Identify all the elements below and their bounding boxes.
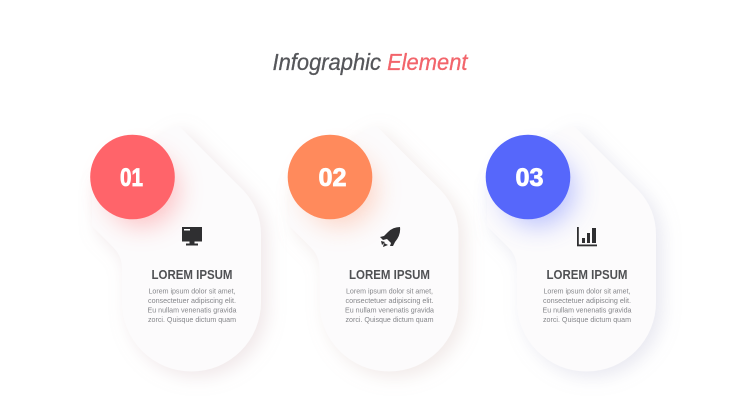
body text 02: zorci. Quisque dictum quam: [346, 315, 434, 324]
body text 01: Eu nullam venenatis gravida: [148, 306, 237, 314]
body text 03: [542, 286, 632, 324]
number circle 02: [288, 135, 372, 219]
body text 03: Lorem ipsum dolor sit amet,: [544, 286, 630, 296]
icon: bar chart: [577, 227, 597, 246]
body text 01: Lorem ipsum dolor sit amet,: [148, 286, 236, 296]
body text 03: Eu nullam venenatis gravida: [542, 306, 632, 314]
card shape 01: [92, 126, 261, 371]
body text 01: [148, 286, 237, 324]
card shape 02: [290, 126, 458, 371]
body text 02: Eu nullam venenatis gravida: [345, 306, 434, 314]
panel: step 02: [288, 126, 458, 371]
icon: rocket: [380, 227, 400, 247]
body text 03: zorci. Quisque dictum quam: [543, 315, 631, 324]
body text 01: consectetuer adipiscing elit.: [148, 296, 236, 305]
circle glow 01: [106, 154, 178, 226]
title: Infographic Element: [272, 49, 469, 75]
body text 02: consectetuer adipiscing elit.: [346, 296, 434, 305]
panel: step 01: [90, 126, 261, 371]
number 03: 03: [516, 164, 544, 192]
icon: monitor: [182, 227, 202, 246]
heading 01: LOREM IPSUM: [152, 268, 232, 282]
body text 02: Lorem ipsum dolor sit amet,: [346, 286, 433, 296]
number circle 01: [90, 135, 175, 219]
heading 03: LOREM IPSUM: [546, 268, 628, 282]
panel: step 03: [486, 126, 656, 371]
number 01: 01: [120, 164, 143, 192]
number 02: 02: [318, 164, 346, 192]
number circle 03: [486, 135, 570, 219]
circle glow 03: [502, 154, 574, 226]
body text 01: zorci. Quisque dictum quam: [148, 315, 236, 324]
body text 02: [345, 286, 434, 324]
heading 02: LOREM IPSUM: [349, 268, 430, 282]
circle glow 02: [304, 154, 376, 226]
body text 03: consectetuer adipiscing elit.: [543, 296, 631, 305]
card shape 03: [487, 126, 656, 371]
